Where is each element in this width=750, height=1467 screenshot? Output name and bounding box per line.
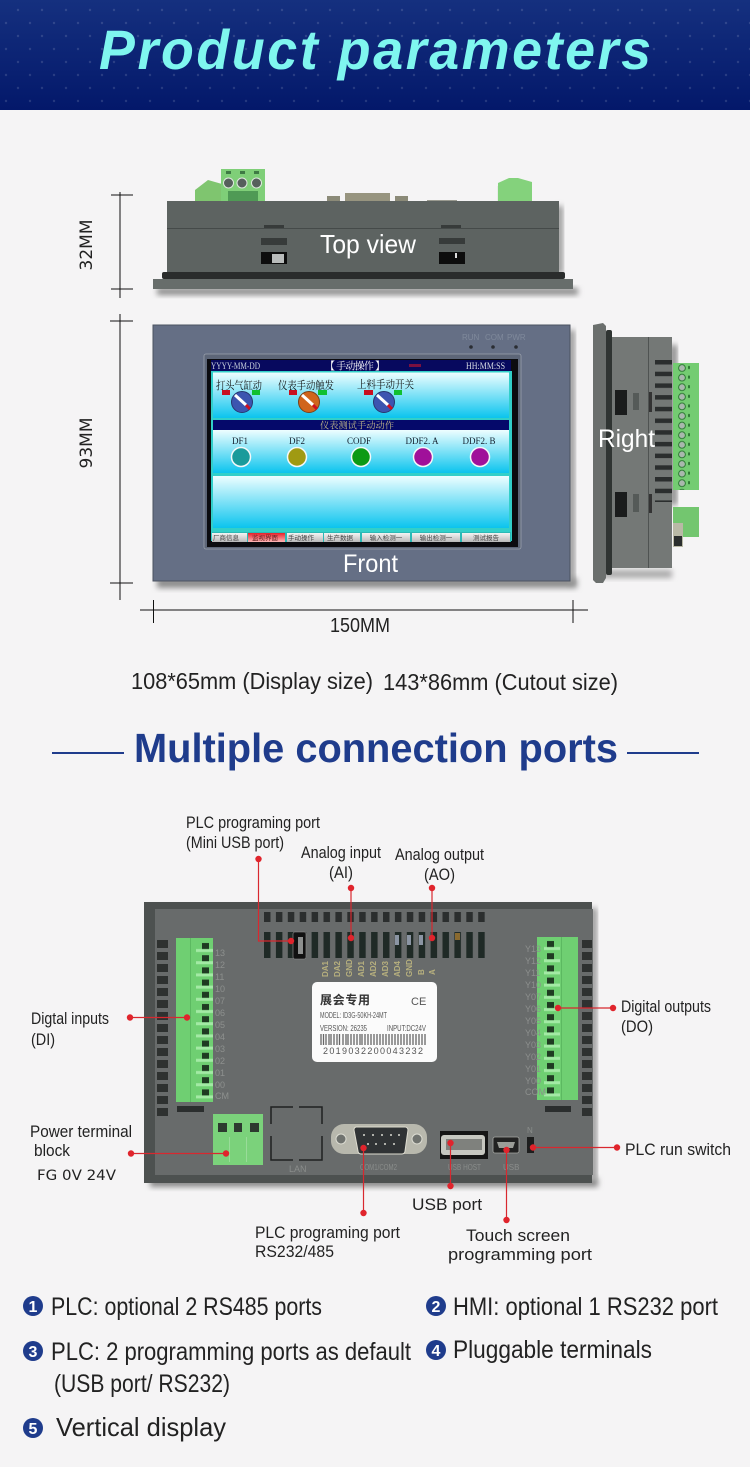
screen top bar — [211, 360, 511, 372]
input numbers: 02 — [215, 1056, 225, 1066]
right green terminal block — [537, 937, 578, 1100]
panel: indicator lamps: DDF2. B — [462, 436, 496, 446]
section heading: Multiple connection ports — [134, 725, 618, 771]
HMI screen — [211, 360, 512, 542]
panel: indicator lamps: DF2 — [289, 436, 305, 446]
label: analog output: Analog output — [395, 845, 484, 864]
feature 2: HMI: optional 1 RS232 port — [453, 1293, 718, 1321]
label: PLC programing port mini USB — [186, 813, 320, 852]
dimension: 150MM width: 150MM — [330, 615, 390, 637]
power terminal block — [213, 1114, 263, 1165]
dimension: 93MM height — [77, 314, 133, 600]
status indicators: RUN — [462, 333, 480, 342]
silkscreen port labels — [321, 959, 437, 977]
header banner — [0, 0, 750, 110]
silkscreen port labels: DA2 — [333, 960, 342, 977]
output numbers: Y06 — [525, 1004, 541, 1014]
callout lines — [130, 859, 617, 1220]
screen nav buttons: 测试报告 — [473, 533, 500, 542]
feature 3: (USB port/ RS232) — [54, 1370, 230, 1398]
screen nav buttons: 输出检测一 — [420, 533, 453, 542]
feature 1: PLC: optional 2 RS485 ports — [51, 1293, 322, 1321]
dimension: 32MM height — [77, 192, 133, 298]
port labels — [30, 813, 731, 1264]
status indicators: PWR — [507, 333, 526, 342]
output numbers: Y13 — [525, 944, 541, 954]
input numbers: 11 — [215, 972, 224, 982]
output numbers: Y01 — [525, 1064, 541, 1074]
bezel and body — [593, 323, 606, 583]
clip windows — [615, 390, 652, 517]
output numbers: Y10 — [525, 980, 541, 990]
DB9 port — [331, 1124, 427, 1172]
product label sticker: MODEL: ID3G-50KH-24MT — [320, 1011, 387, 1020]
label: digital inputs: (DI) — [31, 1030, 55, 1049]
feature 4: Pluggable terminals — [453, 1336, 652, 1364]
product label sticker: 展会专用 — [320, 992, 370, 1007]
product label sticker: 2019032200043232 — [323, 1046, 423, 1056]
label: touch screen programming port — [448, 1226, 592, 1264]
input numbers: 06 — [215, 1008, 225, 1018]
label: digital inputs — [31, 1009, 109, 1049]
case body — [167, 201, 559, 272]
label: USB port: USB port — [412, 1195, 482, 1214]
label: analog output — [395, 845, 484, 884]
input numbers: 10 — [215, 984, 225, 994]
size text: 108*65mm (Display size) — [131, 668, 373, 694]
silkscreen port labels: AD3 — [381, 960, 390, 977]
top vents — [264, 912, 490, 958]
display bezel — [204, 354, 521, 549]
status indicators: COM — [485, 333, 504, 342]
icon: rotary switches — [232, 392, 394, 412]
label: power terminal — [30, 1122, 132, 1184]
panel: switches — [213, 372, 509, 418]
output numbers — [525, 944, 546, 1097]
panel heading bar: 仪表测试手动动作 — [320, 420, 394, 430]
label: power terminal: block — [34, 1141, 70, 1160]
label: digital outputs: Digital outputs — [621, 997, 711, 1016]
output numbers: Y03 — [525, 1040, 541, 1050]
label: power terminal: FG 0V 24V — [37, 1168, 116, 1184]
silkscreen port labels: AD4 — [393, 960, 402, 977]
feature 2: 2 — [432, 1299, 441, 1316]
dimension: 32MM height: 32MM — [77, 220, 97, 270]
label: PLC programing port RS232/485: PLC programing port — [255, 1223, 400, 1242]
side vents — [655, 360, 672, 502]
panel heading bar — [213, 420, 509, 430]
output numbers: Y11 — [525, 968, 540, 978]
case slots and clip windows — [261, 225, 465, 264]
left green terminal block — [176, 938, 213, 1102]
feature 3: 3 — [29, 1344, 38, 1361]
label: Right: Right — [598, 425, 655, 453]
panel: indicator lamps: CODF — [347, 436, 371, 446]
output numbers: Y04 — [525, 1028, 541, 1038]
green terminal connectors — [195, 169, 532, 202]
input numbers: 05 — [215, 1020, 225, 1030]
status indicators — [462, 333, 526, 349]
screen top bar: 【 手动操作 】 — [325, 360, 385, 372]
barcode — [321, 1034, 425, 1045]
product label sticker: CE — [411, 996, 426, 1008]
screen nav buttons — [212, 532, 511, 542]
input numbers: 04 — [215, 1032, 225, 1042]
feature 5: 5 — [29, 1421, 38, 1438]
input numbers: CM — [215, 1091, 229, 1101]
feature 3: PLC: 2 programming ports as default — [51, 1338, 411, 1366]
output numbers: Y05 — [525, 1016, 541, 1026]
product label sticker: INPUT:DC24V — [387, 1024, 427, 1033]
screen nav buttons: 手动操作 — [288, 533, 314, 542]
DB9 port: COM1/COM2 — [360, 1163, 397, 1172]
input numbers: 12 — [215, 960, 225, 970]
silkscreen port labels: GND — [405, 959, 414, 977]
panel: switches: 仪表手动触发 — [278, 378, 334, 392]
screen nav buttons: 生产数据 — [327, 533, 354, 542]
panel: indicator lamps: DDF2. A — [405, 436, 439, 446]
feature 5: Vertical display — [56, 1412, 226, 1442]
dimension: 150MM width — [140, 600, 588, 637]
product label sticker — [312, 982, 437, 1062]
output numbers: Y02 — [525, 1052, 541, 1062]
label: power terminal: Power terminal — [30, 1122, 132, 1141]
feature 4: 4 — [432, 1343, 441, 1360]
title: Product parameters — [99, 18, 651, 81]
size text: 143*86mm (Cutout size) — [383, 669, 618, 695]
silkscreen port labels: B — [417, 969, 426, 975]
label: touch screen programming port: Touch screen — [466, 1226, 570, 1245]
screen top bar: HH:MM:SS — [466, 361, 505, 371]
input numbers: 01 — [215, 1068, 225, 1078]
silkscreen port labels: GND — [345, 959, 354, 977]
silkscreen port labels: DA1 — [321, 960, 330, 977]
product top view — [153, 169, 578, 295]
size text — [131, 668, 618, 695]
silkscreen port labels: A — [428, 969, 437, 975]
DB9 and USB connectors — [327, 193, 457, 202]
label: PLC programing port RS232/485 — [255, 1223, 400, 1261]
input numbers: 07 — [215, 996, 225, 1006]
USB host port: USB HOST — [448, 1163, 481, 1172]
label: touch screen programming port: programming port — [448, 1245, 592, 1264]
label: analog input — [301, 843, 381, 882]
silkscreen port labels: AD1 — [357, 960, 366, 977]
product front view — [153, 325, 577, 588]
label: digital outputs: (DO) — [621, 1017, 653, 1036]
device rear view — [144, 902, 598, 1187]
screen nav buttons: 监视界面 — [252, 533, 278, 542]
label: analog input: (AI) — [329, 863, 353, 882]
silkscreen port labels: AD2 — [369, 960, 378, 977]
label: analog input: Analog input — [301, 843, 381, 862]
label: PLC programing port mini USB: (Mini USB port) — [186, 833, 284, 852]
mini USB port — [293, 932, 306, 959]
green terminal block — [673, 363, 699, 490]
label: PLC programing port RS232/485: RS232/485 — [255, 1242, 334, 1261]
label: PLC programing port mini USB: PLC programing port — [186, 813, 320, 832]
panel: switches: 上料手动开关 — [357, 377, 414, 391]
screen nav buttons: 输入检测一 — [370, 533, 403, 542]
panel: indicator lamps: DF1 — [232, 436, 248, 446]
mini USB touch port — [493, 1137, 519, 1172]
output numbers: Y00 — [525, 1076, 541, 1086]
input numbers: 00 — [215, 1080, 225, 1090]
label: digital inputs: Digtal inputs — [31, 1009, 109, 1028]
input numbers: 13 — [215, 948, 225, 958]
label: digital outputs — [621, 997, 711, 1036]
label: PLC run switch: PLC run switch — [625, 1140, 731, 1159]
output numbers: Y12 — [525, 956, 541, 966]
label: analog output: (AO) — [424, 865, 455, 884]
feature 1: 1 — [29, 1299, 38, 1316]
analog components — [395, 933, 460, 945]
USB host port — [440, 1131, 488, 1172]
output numbers: Y07 — [525, 992, 541, 1002]
mini USB touch port: USB — [503, 1163, 519, 1172]
input numbers: 03 — [215, 1044, 225, 1054]
dimension: 93MM height: 93MM — [77, 418, 97, 468]
callout dots — [127, 856, 620, 1223]
input numbers — [215, 948, 229, 1101]
run switch: N — [527, 1126, 533, 1135]
LAN port cover: LAN — [289, 1164, 307, 1174]
screen top bar: YYYY-MM-DD — [211, 361, 260, 371]
product label sticker: VERSION: 26235 — [320, 1024, 367, 1033]
output numbers: COM — [525, 1087, 546, 1097]
panel: indicator lamps — [213, 430, 509, 473]
lower connector — [673, 507, 699, 547]
label: Front: Front — [343, 550, 398, 578]
label: Top view: Top view — [320, 229, 416, 259]
panel: switches: 打头气缸动 — [216, 378, 262, 392]
side vents — [157, 940, 592, 1120]
feature 3 — [23, 1338, 411, 1398]
run switch — [527, 1126, 534, 1153]
LAN port cover — [271, 1107, 322, 1174]
screen nav buttons: 厂商信息 — [213, 533, 240, 542]
product right view — [593, 323, 699, 583]
feature list — [23, 1293, 718, 1442]
panel: empty area — [213, 476, 509, 528]
